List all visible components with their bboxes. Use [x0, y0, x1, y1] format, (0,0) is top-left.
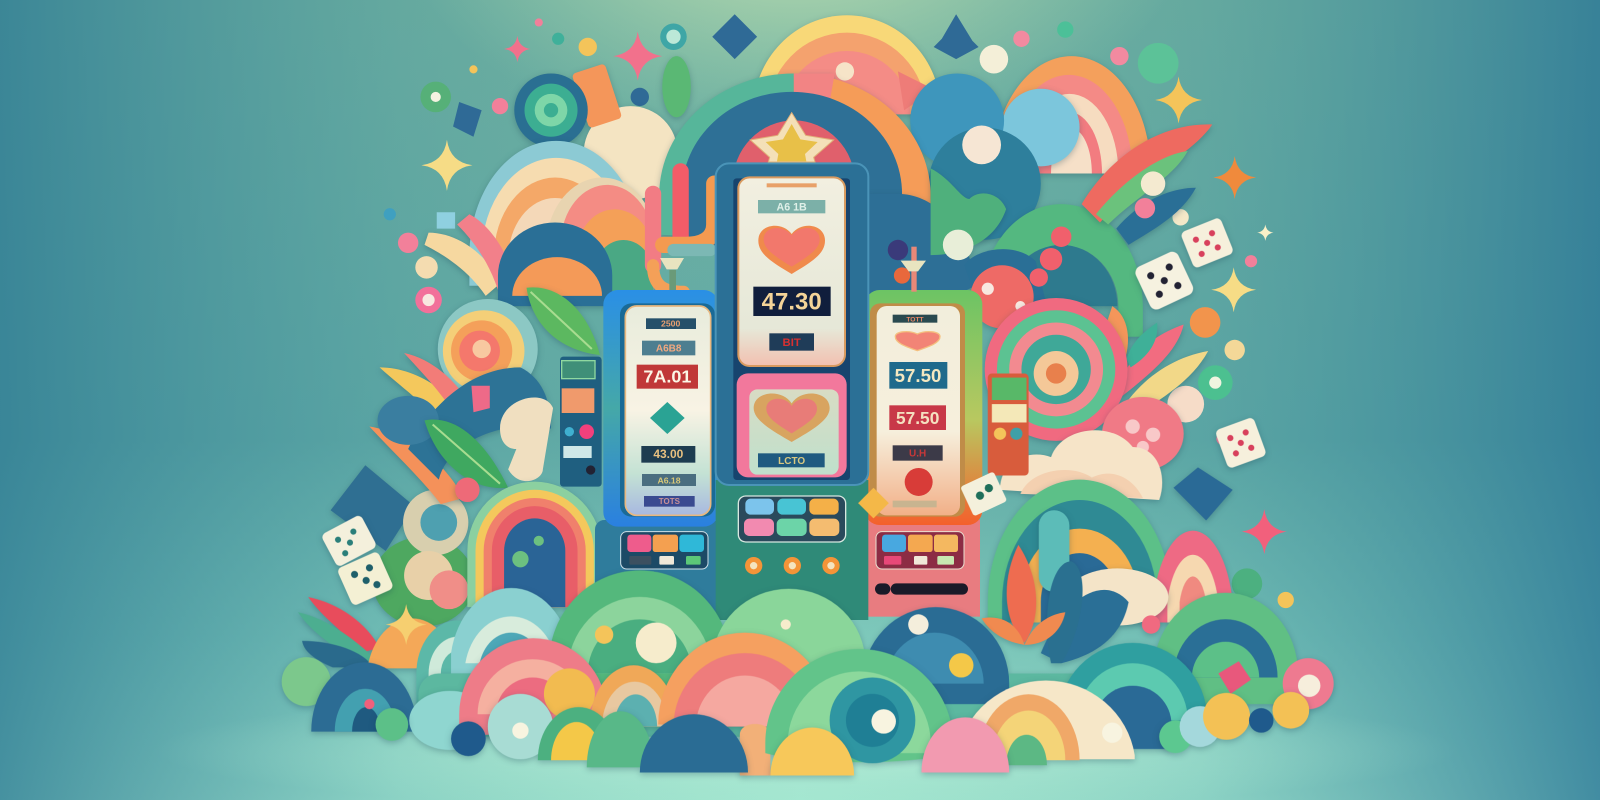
- back arch: top yellow and coral: [753, 15, 941, 114]
- reel rows: 57.50: [896, 408, 939, 428]
- cream dome and left swirl: [514, 56, 691, 200]
- slot machine: center: [716, 163, 868, 620]
- bone shape: [500, 398, 553, 481]
- scattered sparkles and confetti: [384, 14, 1294, 608]
- reel rows: A6 1B: [777, 202, 807, 214]
- bottom row domes and balls: [376, 692, 1309, 776]
- reel rows: TOTS: [659, 497, 681, 506]
- back rainbow: upper right: [992, 56, 1151, 173]
- reel rows: [637, 318, 698, 507]
- big rainbow arch behind center machine: [659, 73, 931, 245]
- right blue shape and green arch: [867, 168, 1143, 337]
- left rainbow cluster: [424, 141, 653, 306]
- concentric swirl: right: [985, 298, 1128, 441]
- slot machine: right green: [865, 290, 982, 617]
- reel rows: 43.00: [653, 447, 684, 461]
- slot machine: center: LCTO: [778, 456, 805, 467]
- reel rows: TOTT: [906, 316, 924, 323]
- reel rows: 2500: [661, 319, 680, 329]
- tile heart: [754, 393, 830, 442]
- left feather fans: [369, 353, 551, 504]
- reel rows: U.H: [909, 449, 926, 460]
- reel rows: [753, 183, 831, 351]
- feather fans: upper right: [1082, 124, 1212, 367]
- reel rows: A6.18: [657, 475, 681, 485]
- reel rows: 7A.01: [643, 367, 691, 387]
- reel rows: 47.30: [762, 289, 822, 316]
- gold star on center machine: [750, 113, 834, 162]
- left swirl: [438, 299, 538, 399]
- dice: [321, 217, 1267, 606]
- levers: [660, 247, 926, 292]
- curved pipes: [653, 171, 714, 292]
- leaves: left: [424, 287, 600, 502]
- blue book and globe: [331, 465, 474, 627]
- side control panel left: [560, 357, 602, 487]
- rainbow arch window: [467, 482, 602, 607]
- reel rows: BIT: [783, 337, 801, 349]
- blue flower blob: [910, 73, 1080, 240]
- feather fans: right middle: [1118, 322, 1208, 418]
- right arches behind bottom row: [988, 480, 1233, 622]
- left fan and small arches: [282, 588, 571, 706]
- tropical plant: [982, 510, 1168, 663]
- side control panel right: [988, 373, 1029, 476]
- reel rows: [889, 315, 947, 507]
- bottom row arches: back: [418, 570, 1334, 737]
- small die and diamond token: [858, 471, 1007, 518]
- reel rows: A6B8: [656, 343, 682, 354]
- floor glow: [153, 689, 1459, 800]
- right cloud and red ball: [1000, 397, 1233, 520]
- reel rows: 57.50: [895, 365, 941, 386]
- slot machine: left blue: [595, 290, 722, 613]
- bottom row arches: middle: [311, 633, 1207, 776]
